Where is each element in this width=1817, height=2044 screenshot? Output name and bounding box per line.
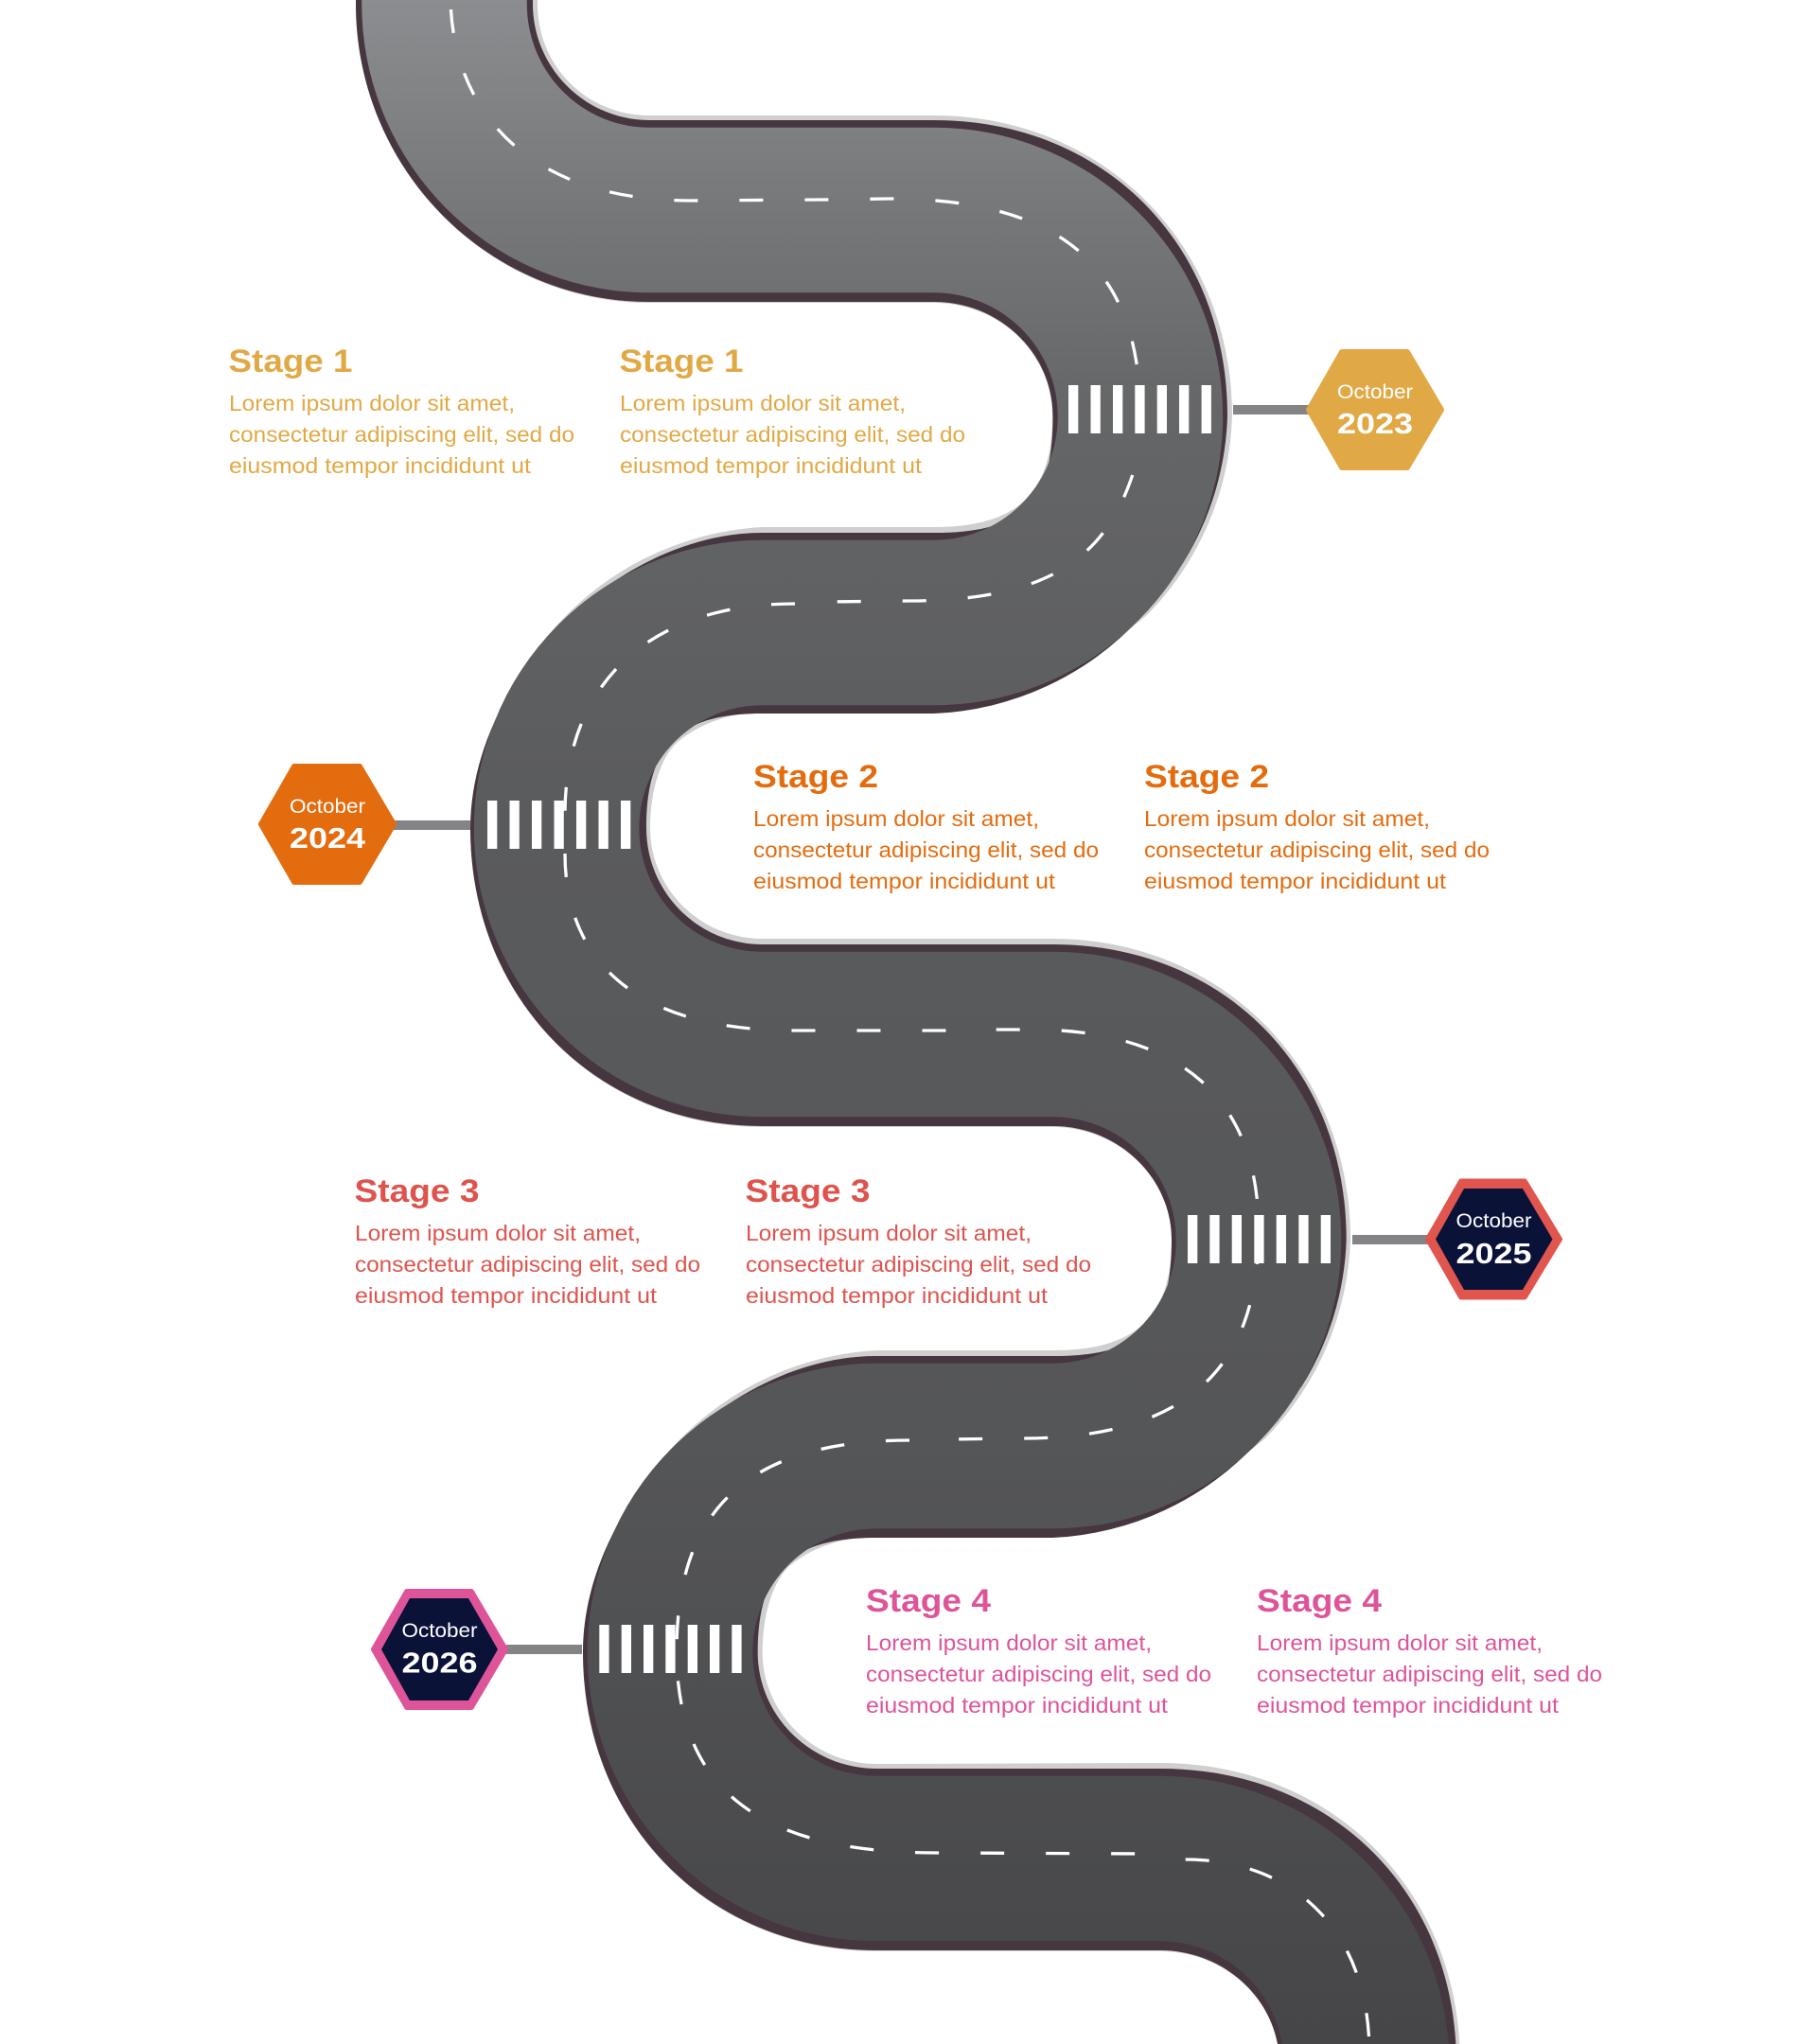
text block: Stage 3 left: eiusmod tempor incididunt ut [355,1283,658,1308]
badge: October 2025: 2025 [1455,1237,1531,1270]
text block: Stage 3 left: consectetur adipiscing elit, sed do [355,1252,700,1277]
badge: October 2026 [374,1592,505,1707]
text block: Stage 4 left [866,1583,1211,1718]
text block: Stage 1 right: consectetur adipiscing elit, sed do [620,422,965,447]
text block: Stage 1 left: Stage 1 [229,344,352,379]
badge: October 2024 [261,766,394,882]
badge: October 2024: 2024 [290,821,366,855]
text block: Stage 3 right: Stage 3 [746,1173,871,1209]
crosswalk 3 [1188,1215,1331,1263]
text block: Stage 1 right: Lorem ipsum dolor sit amet, [620,391,906,415]
connector 2026 [506,1645,582,1654]
road asphalt surface [445,0,1367,2044]
road highlight edge [356,0,1460,2044]
text block: Stage 3 right: Lorem ipsum dolor sit amet, [746,1221,1032,1245]
text block: Stage 3 right: consectetur adipiscing elit, sed do [746,1252,1091,1277]
text block: Stage 3 right: eiusmod tempor incididunt ut [746,1283,1049,1308]
text block: Stage 3 left [354,1173,700,1308]
badge: October 2026: 2026 [401,1647,477,1679]
text block: Stage 2 right: Stage 2 [1144,759,1269,795]
text block: Stage 1 left: consectetur adipiscing elit, sed do [229,422,574,447]
text block: Stage 1 right: eiusmod tempor incididunt ut [620,453,923,478]
text block: Stage 2 left [753,759,1099,893]
text block: Stage 2 left: Lorem ipsum dolor sit amet, [753,806,1039,831]
text block: Stage 4 right: consectetur adipiscing elit, sed do [1257,1662,1602,1686]
badge: October 2025 [1428,1181,1560,1296]
text block: Stage 4 left: eiusmod tempor incididunt ut [866,1693,1169,1718]
text block: Stage 3 left: Lorem ipsum dolor sit amet, [355,1221,641,1245]
text block: Stage 4 left: consectetur adipiscing elit, sed do [866,1662,1211,1686]
badge: October 2023 [1309,352,1441,467]
text block: Stage 2 right: eiusmod tempor incididunt ut [1144,869,1447,893]
text block: Stage 2 left: consectetur adipiscing elit, sed do [753,837,1099,862]
text block: Stage 2 right [1144,759,1490,893]
text block: Stage 4 right: eiusmod tempor incididunt ut [1257,1693,1560,1718]
badge: October 2024: October [290,796,365,818]
road dark kerb [356,0,1456,2044]
text block: Stage 2 right: Lorem ipsum dolor sit amet, [1144,806,1430,831]
text block: Stage 2 left: Stage 2 [753,759,878,795]
badge: October 2026: October [401,1620,478,1642]
text block: Stage 3 right [746,1173,1091,1308]
connector 2023 [1233,405,1313,414]
crosswalk 2 [487,801,630,849]
badge: October 2023: 2023 [1337,407,1413,440]
badge: October 2023: October [1337,381,1413,403]
connector 2024 [390,820,470,830]
text block: Stage 1 right [619,344,965,478]
text block: Stage 4 left: Stage 4 [866,1583,991,1619]
text block: Stage 4 right: Lorem ipsum dolor sit amet, [1257,1630,1543,1655]
text block: Stage 1 left: Lorem ipsum dolor sit amet, [229,391,515,415]
text block: Stage 4 right: Stage 4 [1257,1583,1382,1619]
crosswalk 1 [1068,385,1211,433]
connector 2025 [1352,1235,1430,1244]
text block: Stage 1 left [229,344,574,478]
crosswalk 4 [599,1625,742,1673]
text block: Stage 1 right: Stage 1 [619,344,744,379]
text block: Stage 4 left: Lorem ipsum dolor sit amet, [866,1630,1152,1655]
badge: October 2025: October [1455,1210,1532,1232]
text block: Stage 2 right: consectetur adipiscing elit, sed do [1144,837,1490,862]
text block: Stage 3 left: Stage 3 [354,1173,479,1209]
text block: Stage 2 left: eiusmod tempor incididunt ut [753,869,1056,893]
text block: Stage 4 right [1257,1583,1602,1718]
dashed centre line [450,0,1369,2044]
text block: Stage 1 left: eiusmod tempor incididunt ut [229,453,532,478]
winding road [356,0,1460,2044]
